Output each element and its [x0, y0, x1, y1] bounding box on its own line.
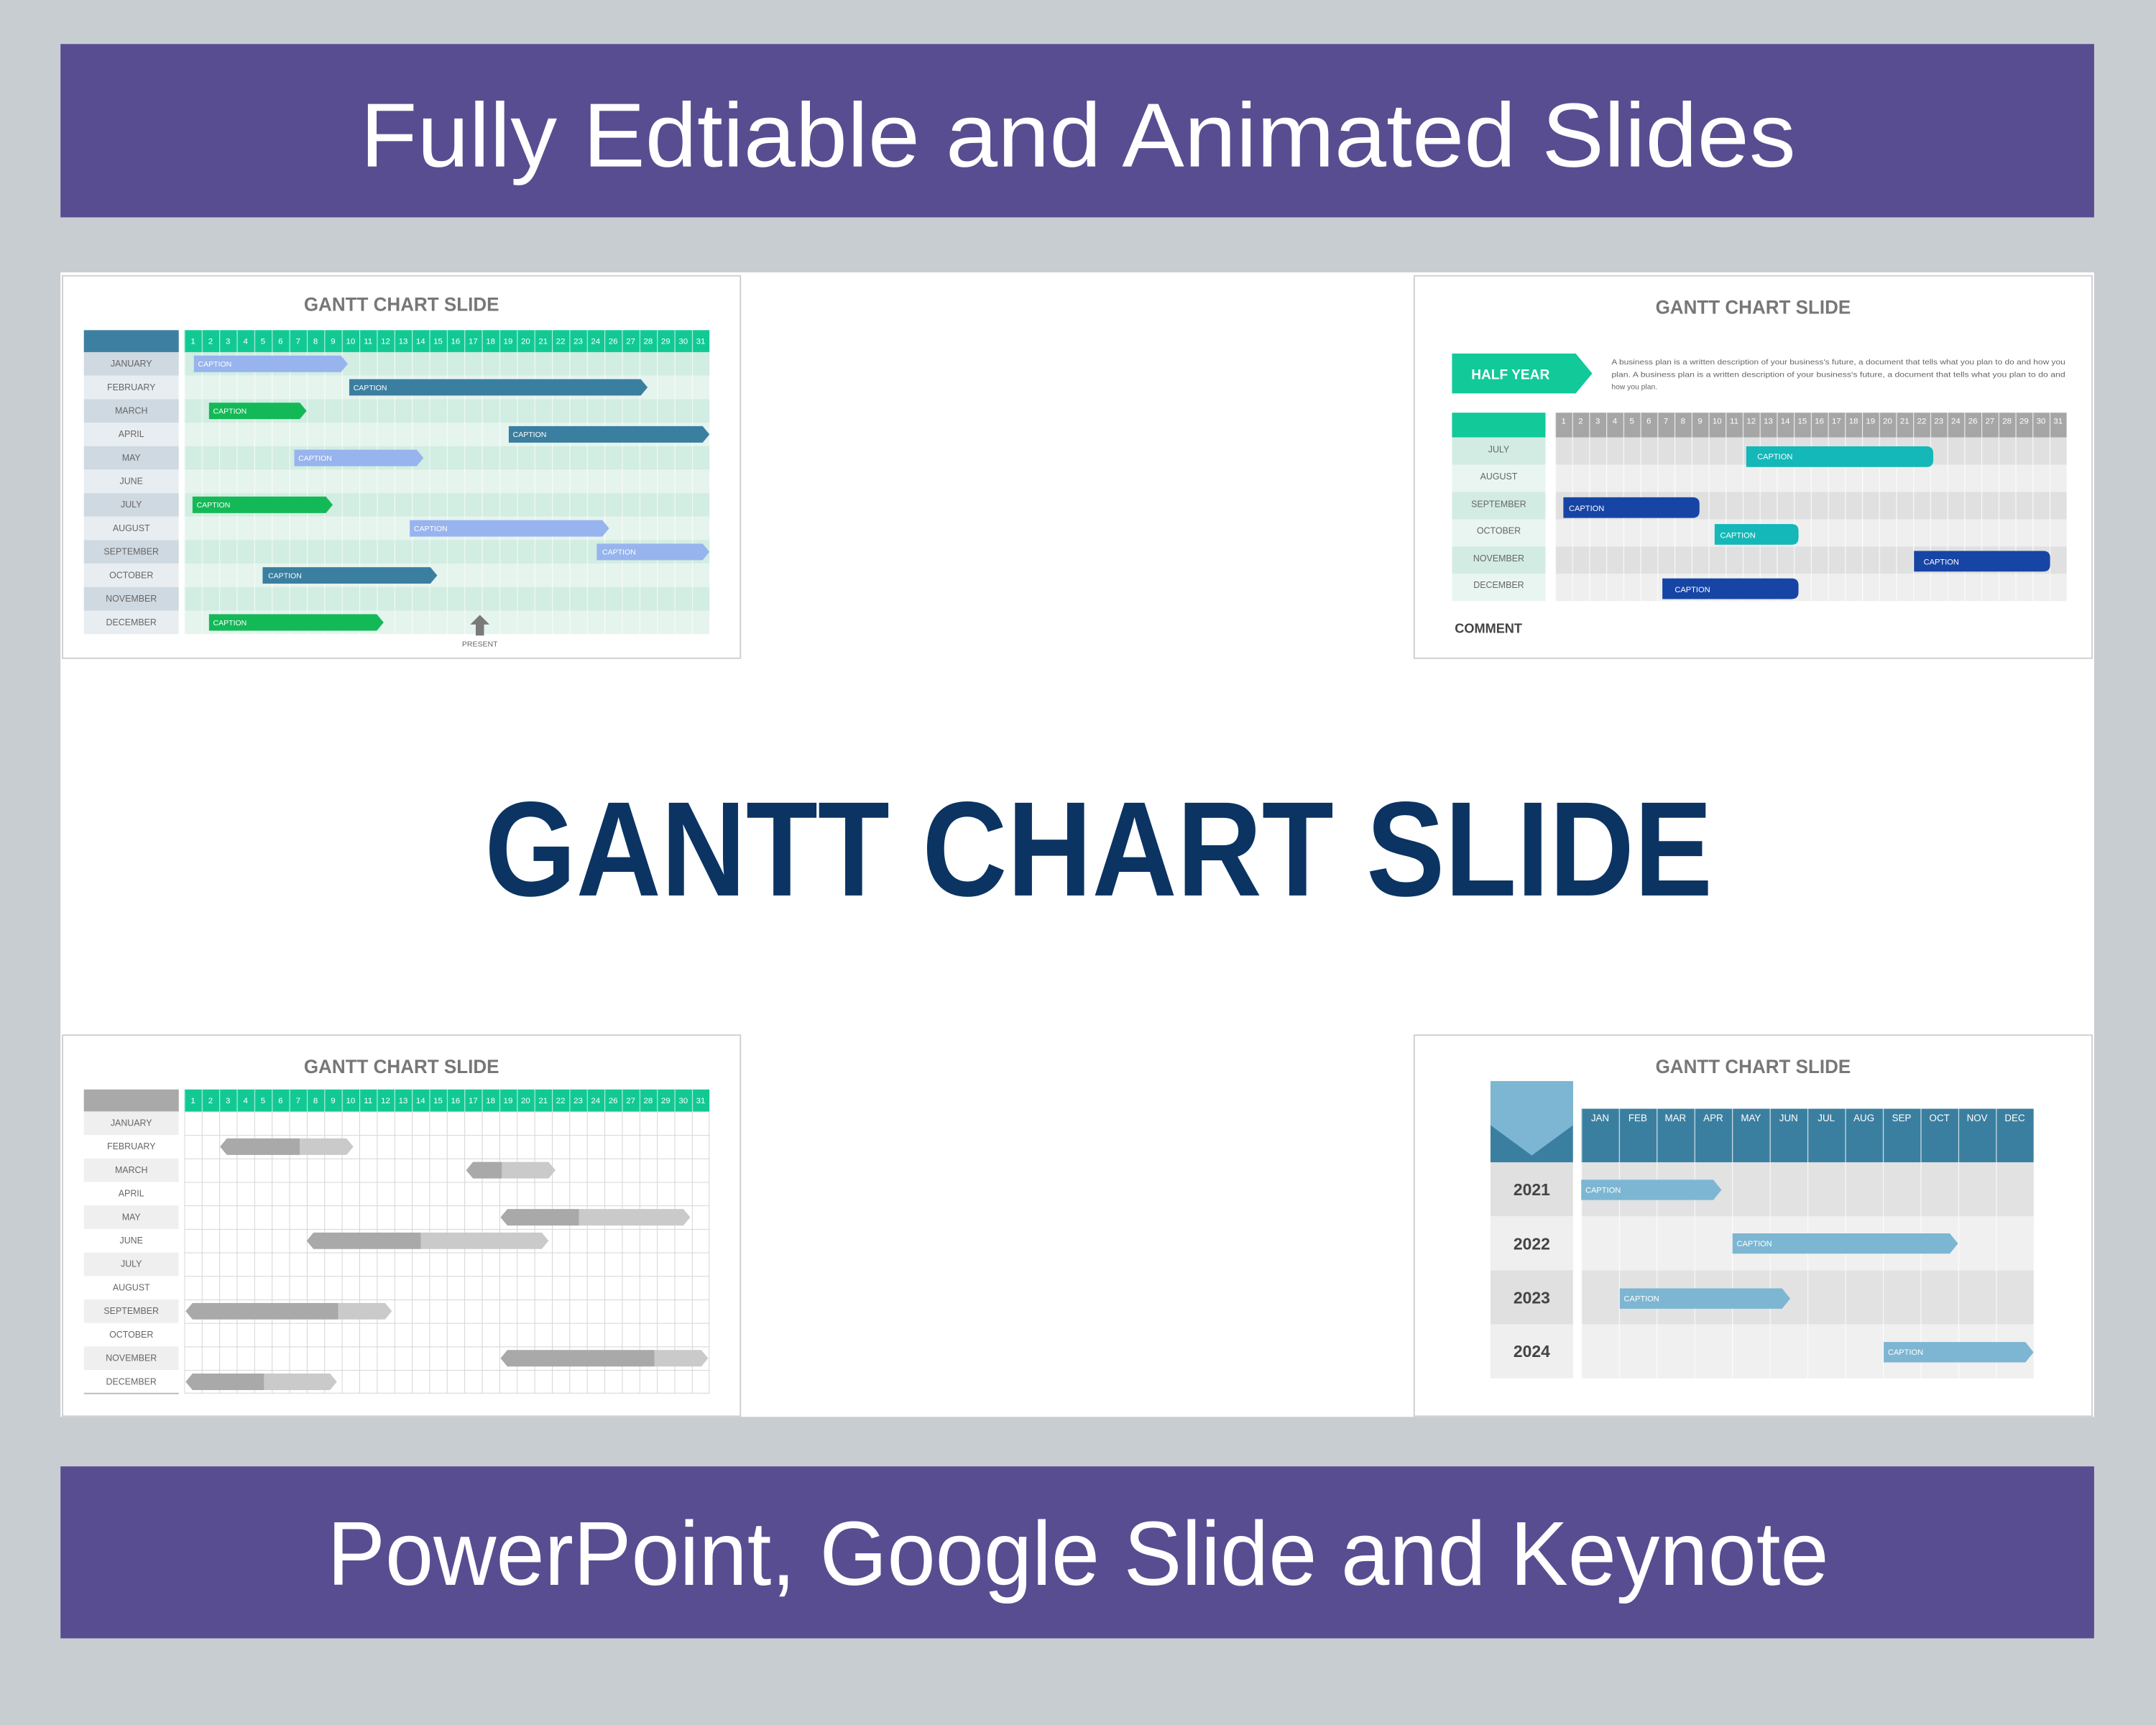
- slide 2 day numbers: 30: [2037, 417, 2045, 426]
- slide 3 month labels: JUNE: [119, 1236, 143, 1246]
- slide 1 day numbers: 31: [696, 337, 705, 346]
- bottom banner: [60, 1466, 2094, 1638]
- slide 1 day numbers: 21: [538, 337, 548, 346]
- slide 3 day numbers: 12: [381, 1097, 390, 1105]
- slide 3 day numbers: 27: [626, 1097, 635, 1105]
- slide 1 day numbers: 17: [469, 337, 478, 346]
- slide 1 day numbers: 5: [261, 337, 265, 346]
- slide 1 bars: CAPTION: [298, 454, 332, 463]
- description paragraph: A business plan is a written description of your business's future, a document that tells what you plan to do and how you: [1611, 359, 2065, 367]
- slide 3 day numbers: 24: [591, 1097, 601, 1105]
- slide 3 month labels: MAY: [122, 1212, 141, 1222]
- slide 1 day numbers: 12: [381, 337, 390, 346]
- panel: slide 2 half-year gantt: [1414, 276, 2092, 658]
- panel: slide 3 gray gantt: [63, 1035, 740, 1416]
- slide 2 bars: CAPTION: [1569, 505, 1604, 513]
- slide 2 day numbers: 2: [1578, 417, 1583, 426]
- slide 1 day numbers: 27: [626, 337, 635, 346]
- slide 2 day numbers: 10: [1713, 417, 1722, 426]
- slide 3 day numbers: 20: [521, 1097, 530, 1105]
- half year tag: [1452, 354, 1593, 393]
- slide 1 day numbers: 7: [296, 337, 300, 346]
- slide 1 day numbers: 2: [208, 337, 213, 346]
- slide 3 month labels: JULY: [121, 1259, 142, 1269]
- slide 2 day numbers: 24: [1951, 417, 1961, 426]
- slide 1 day numbers: 28: [644, 337, 653, 346]
- slide 2 month labels: DECEMBER: [1473, 580, 1524, 590]
- slide 2 day numbers: 29: [2019, 417, 2029, 426]
- slide 1 bars: CAPTION: [213, 619, 247, 627]
- slide 3 day numbers: 10: [346, 1097, 355, 1105]
- slide 2 day numbers: 22: [1917, 417, 1926, 426]
- icon: present arrow: PRESENT: [462, 640, 498, 649]
- slide 1 month labels: MARCH: [115, 406, 147, 416]
- slide 2 day numbers: 9: [1697, 417, 1703, 426]
- panel: slide 1 monthly gantt: [63, 276, 740, 658]
- slide 1 month labels: FEBRUARY: [107, 382, 156, 392]
- slide 3 day numbers: 14: [416, 1097, 425, 1105]
- slide 4 bars: CAPTION: [1624, 1295, 1659, 1304]
- slide 1 day numbers: 9: [331, 337, 336, 346]
- slide 3 day numbers: 16: [451, 1097, 460, 1105]
- slide 3 day numbers: 17: [469, 1097, 478, 1105]
- slide 2 day numbers: 20: [1883, 417, 1892, 426]
- slide 4 month header labels: NOV: [1967, 1113, 1988, 1123]
- white content panel: [60, 272, 2094, 1417]
- slide 1 day numbers: 1: [190, 337, 195, 346]
- slide 1 bars: CAPTION: [602, 548, 636, 557]
- slide 3 hexagon bars: [185, 1138, 708, 1390]
- slide 2 bars: CAPTION: [1674, 586, 1710, 594]
- slide 4 month header labels: SEP: [1892, 1113, 1912, 1123]
- slide 3 day numbers: 28: [644, 1097, 653, 1105]
- slide 3 month labels: DECEMBER: [106, 1376, 157, 1386]
- slide 3 day numbers: 11: [364, 1097, 372, 1105]
- slide 2 day numbers: 8: [1681, 417, 1685, 426]
- icon: present arrow: [462, 615, 498, 649]
- slide 4 month header labels: AUG: [1853, 1113, 1874, 1123]
- slide 2 bars: CAPTION: [1720, 531, 1756, 540]
- slide 2 day numbers: 15: [1798, 417, 1807, 426]
- slide 2 day numbers: 11: [1730, 417, 1738, 426]
- slide 3 day numbers: 18: [486, 1097, 495, 1105]
- slide 1 day numbers: 3: [226, 337, 230, 346]
- slide 2 day numbers: 26: [1968, 417, 1978, 426]
- slide 3 month labels: SEPTEMBER: [103, 1306, 159, 1316]
- slide 1 day numbers: 4: [244, 337, 249, 346]
- slide 4 bars: [1581, 1179, 2034, 1363]
- slide 4 year labels: 2021: [1514, 1180, 1550, 1199]
- slide 1 month labels: NOVEMBER: [106, 594, 157, 604]
- half year tag: HALF YEAR: [1471, 367, 1549, 382]
- slide 1 bars: CAPTION: [268, 571, 302, 580]
- slide 1 day numbers: 23: [573, 337, 583, 346]
- slide 3 day numbers: 3: [226, 1097, 230, 1105]
- slide 2 day numbers: 28: [2002, 417, 2012, 426]
- slide 4 month header labels: MAY: [1741, 1113, 1761, 1123]
- main title: GANTT CHART SLIDE: [484, 773, 1713, 924]
- slide 2 day numbers: 21: [1900, 417, 1909, 426]
- slide 3 day numbers: 26: [609, 1097, 618, 1105]
- slide 3 day numbers: 15: [433, 1097, 443, 1105]
- slide 2 bars: CAPTION: [1924, 558, 1959, 567]
- slide 4 month header labels: JAN: [1591, 1113, 1609, 1123]
- slide 2 month labels: OCTOBER: [1477, 526, 1521, 536]
- slide 3 day numbers: 22: [556, 1097, 565, 1105]
- slide 4 month header labels: MAR: [1664, 1113, 1687, 1123]
- slide 2 day numbers: 1: [1562, 417, 1566, 426]
- slide 1 bars: CAPTION: [354, 384, 387, 392]
- slide 3 day numbers: 4: [244, 1097, 249, 1105]
- slide 3 day numbers: 1: [190, 1097, 195, 1105]
- slide 1 day numbers: 10: [346, 337, 355, 346]
- slide 4 bars: CAPTION: [1585, 1186, 1621, 1195]
- slide 1 day numbers: 20: [521, 337, 530, 346]
- slide 3 month labels: APRIL: [119, 1189, 144, 1199]
- slide 2 day numbers: 13: [1764, 417, 1773, 426]
- slide 2 day numbers: 17: [1832, 417, 1841, 426]
- slide 1 day numbers: 29: [661, 337, 671, 346]
- slide 3 day numbers: 21: [538, 1097, 548, 1105]
- slide 1 day numbers: 18: [486, 337, 495, 346]
- slide 2 day numbers: 7: [1664, 417, 1668, 426]
- slide 1 day numbers: 11: [364, 337, 372, 346]
- icon: corner chevron block: [1491, 1081, 1573, 1162]
- slide 3 title: GANTT CHART SLIDE: [304, 1056, 499, 1077]
- slide 4 year labels: 2024: [1514, 1342, 1550, 1361]
- slide 2 day numbers: 16: [1815, 417, 1824, 426]
- slide 3 month labels: OCTOBER: [109, 1330, 153, 1340]
- slide 3 day numbers: 9: [331, 1097, 336, 1105]
- slide 4 month header labels: JUL: [1818, 1113, 1835, 1123]
- slide 1 day numbers: 13: [399, 337, 407, 346]
- slide 1 month labels: JANUARY: [111, 359, 152, 369]
- slide 3 day numbers: 2: [208, 1097, 213, 1105]
- slide 2 title: GANTT CHART SLIDE: [1656, 296, 1851, 318]
- slide 2 month labels: SEPTEMBER: [1471, 499, 1526, 509]
- description paragraph: how you plan.: [1611, 384, 1657, 392]
- slide 2 day numbers: 5: [1629, 417, 1634, 426]
- slide 2 bars: CAPTION: [1757, 453, 1792, 461]
- slide 1 day numbers: 6: [278, 337, 283, 346]
- description paragraph: plan. A business plan is a written description of your business's future, a document that tells what you plan to do and: [1611, 371, 2065, 379]
- slide 4 month header labels: FEB: [1628, 1113, 1647, 1123]
- slide 2 day numbers: 4: [1613, 417, 1618, 426]
- slide 3 day numbers: 8: [313, 1097, 318, 1105]
- slide 3 month labels: MARCH: [115, 1165, 147, 1175]
- slide 2 month labels: AUGUST: [1480, 472, 1518, 482]
- slide 1 month labels: MAY: [122, 453, 141, 463]
- slide 1 day numbers: 15: [433, 337, 443, 346]
- slide 1 day numbers: 8: [313, 337, 318, 346]
- bottom banner: PowerPoint, Google Slide and Keynote: [327, 1503, 1829, 1604]
- slide 4 year labels: 2023: [1514, 1288, 1550, 1307]
- slide 1 day numbers: 24: [591, 337, 601, 346]
- slide 3 day numbers: 31: [696, 1097, 705, 1105]
- slide 3 day numbers: 13: [399, 1097, 407, 1105]
- slide 3 month labels: NOVEMBER: [106, 1353, 157, 1363]
- slide 1 day numbers: 16: [451, 337, 460, 346]
- slide 1 month labels: AUGUST: [113, 523, 150, 533]
- slide 2 day numbers: 27: [1985, 417, 1994, 426]
- slide 3 day numbers: 19: [504, 1097, 512, 1105]
- slide 1 month labels: OCTOBER: [109, 570, 153, 580]
- top banner: [60, 44, 2094, 217]
- panel: slide 4 yearly gantt: [1414, 1035, 2092, 1416]
- slide 4 month header labels: JUN: [1779, 1113, 1798, 1123]
- slide 4 title: GANTT CHART SLIDE: [1656, 1056, 1851, 1077]
- slide 1 day numbers: 26: [609, 337, 618, 346]
- comment label: COMMENT: [1455, 621, 1522, 635]
- slide 2 day numbers: 14: [1781, 417, 1790, 426]
- slide 1 day numbers: 30: [678, 337, 688, 346]
- slide 3 month labels: AUGUST: [113, 1282, 150, 1292]
- slide 3 day numbers: 23: [573, 1097, 583, 1105]
- slide 1 day numbers: 14: [416, 337, 425, 346]
- slide 3 day numbers: 29: [661, 1097, 671, 1105]
- slide 4 bars: CAPTION: [1888, 1348, 1923, 1357]
- slide 3 day numbers: 5: [261, 1097, 265, 1105]
- slide 4 month header labels: OCT: [1930, 1113, 1950, 1123]
- slide 3 month labels: FEBRUARY: [107, 1141, 156, 1151]
- slide 2 day numbers: 6: [1646, 417, 1651, 426]
- slide 1 day numbers: 19: [504, 337, 512, 346]
- slide 3 day numbers: 30: [678, 1097, 688, 1105]
- slide 1 month labels: SEPTEMBER: [103, 547, 159, 557]
- slide 1 month labels: DECEMBER: [106, 617, 157, 627]
- slide 1 bars: CAPTION: [513, 431, 546, 439]
- slide 4 month header labels: APR: [1703, 1113, 1723, 1123]
- slide 1 bars: CAPTION: [198, 360, 231, 369]
- slide 4 month header labels: DEC: [2004, 1113, 2025, 1123]
- slide 1 month labels: APRIL: [119, 429, 144, 439]
- slide 3 day numbers: 7: [296, 1097, 300, 1105]
- slide 2 day numbers: 18: [1849, 417, 1858, 426]
- slide 1 day numbers: 22: [556, 337, 565, 346]
- slide 1 title: GANTT CHART SLIDE: [304, 294, 499, 316]
- slide 1 bars: CAPTION: [414, 525, 448, 533]
- slide 1 bars: CAPTION: [197, 501, 230, 510]
- slide 3 month labels: JANUARY: [111, 1118, 152, 1128]
- slide 2 day numbers: 23: [1934, 417, 1943, 426]
- slide 4 year labels: 2022: [1514, 1235, 1550, 1254]
- top banner: Fully Edtiable and Animated Slides: [360, 85, 1796, 186]
- slide 1 month labels: JUNE: [119, 477, 143, 487]
- slide 2 month labels: JULY: [1488, 445, 1510, 455]
- slide 2 month labels: NOVEMBER: [1473, 553, 1524, 564]
- slide 2 day numbers: 3: [1595, 417, 1600, 426]
- slide 2 day numbers: 12: [1746, 417, 1756, 426]
- slide 2 day numbers: 31: [2053, 417, 2063, 426]
- slide 3 day numbers: 6: [278, 1097, 283, 1105]
- slide 4 bars: CAPTION: [1736, 1240, 1772, 1248]
- slide 2 day numbers: 19: [1866, 417, 1875, 426]
- slide 2 bars: [1563, 446, 2050, 599]
- slide 1 bars: CAPTION: [213, 408, 247, 416]
- slide 1 bars: [193, 356, 709, 631]
- slide 1 month labels: JULY: [121, 500, 142, 510]
